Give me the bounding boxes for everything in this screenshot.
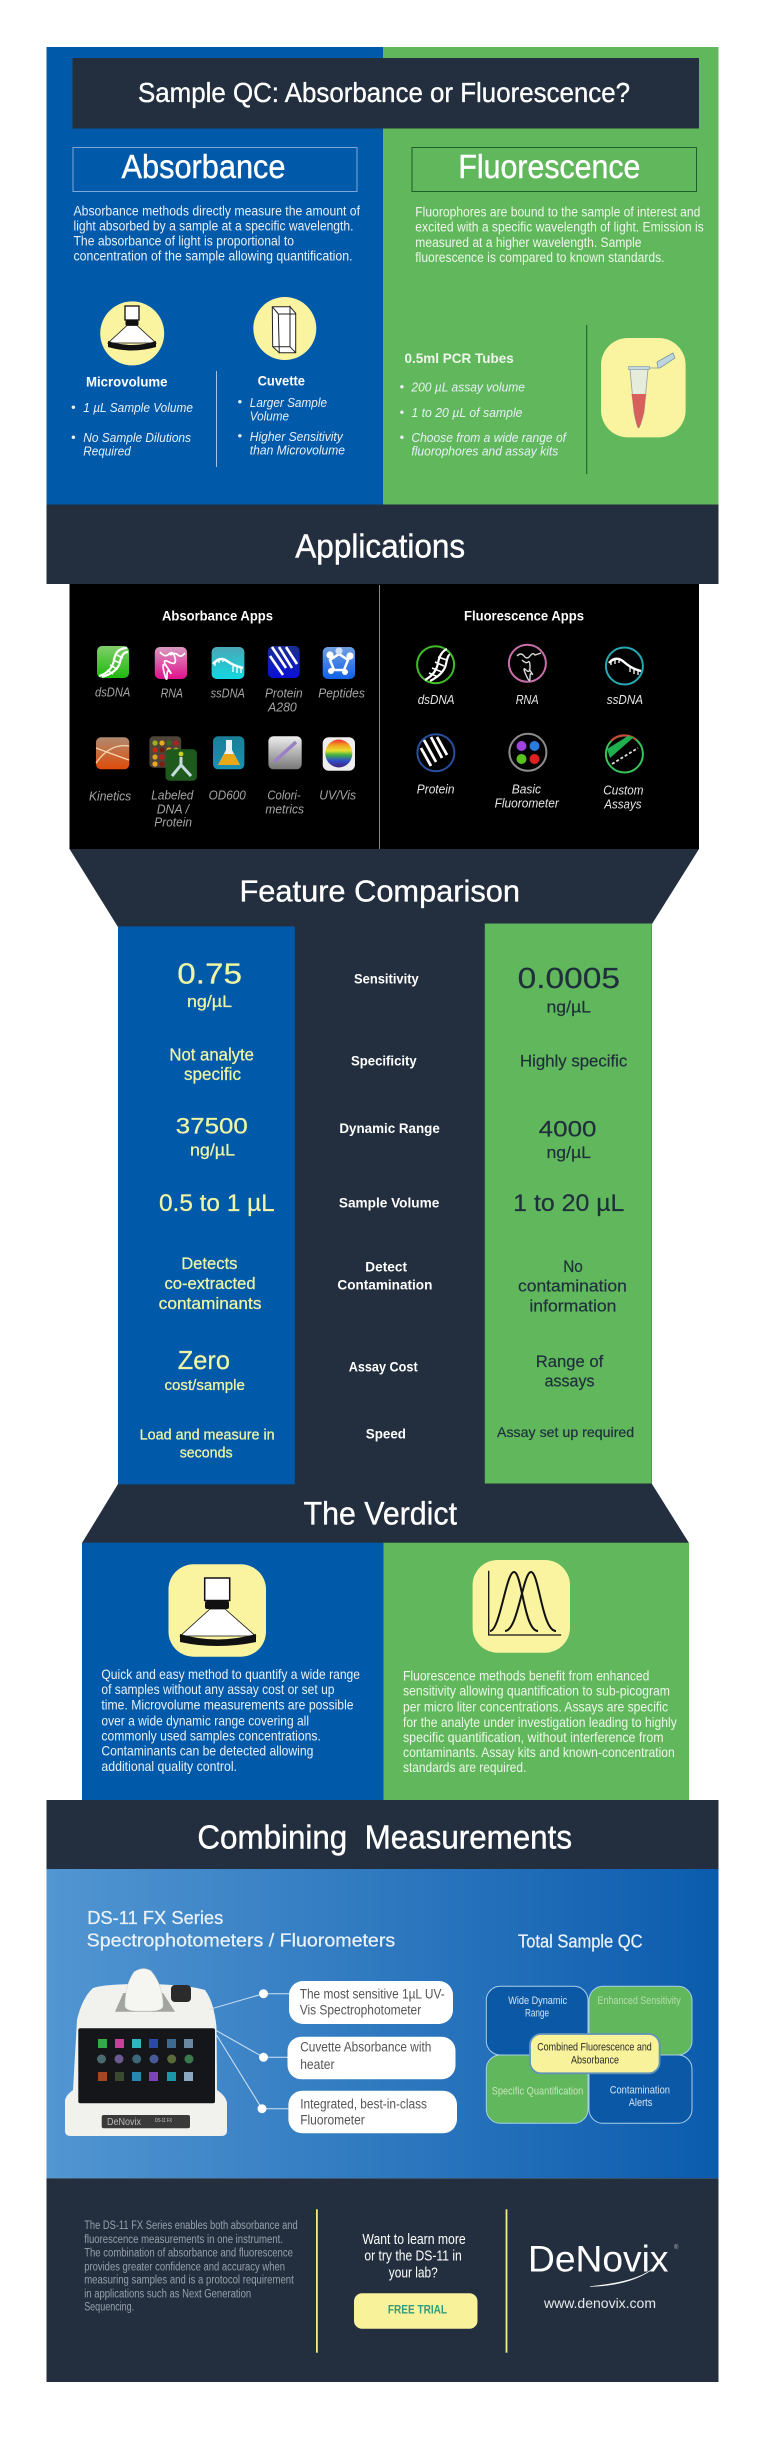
absorbance labels row 2: Protein bbox=[154, 815, 192, 830]
fluorescence labels: ssDNA bbox=[607, 692, 643, 707]
icon: protein ring bbox=[417, 734, 454, 771]
call to action: your lab? bbox=[389, 2266, 438, 2282]
column: fluorescence features: 1 to 20 µL bbox=[513, 1190, 624, 1217]
column: fluorescence features: assays bbox=[545, 1372, 594, 1391]
cuvette features: • bbox=[238, 394, 242, 409]
panel: fluorescence introduction bbox=[383, 47, 718, 505]
text block: absorbance description: The absorbance of light is proportional to bbox=[74, 234, 294, 249]
panel: applications bbox=[70, 584, 699, 849]
text block: absorbance verdict: time. Microvolume measurements are possible bbox=[101, 1696, 354, 1712]
absorbance labels row 2: Kinetics bbox=[89, 789, 132, 804]
text block: DS-11 summary bbox=[84, 2220, 298, 2314]
icon: dsDNA app bbox=[97, 646, 129, 678]
heading: Absorbance: Absorbance bbox=[122, 148, 286, 185]
absorbance labels row 2: UV/Vis bbox=[319, 787, 356, 802]
icon: kinetics app bbox=[96, 737, 129, 769]
column: feature names: Detect bbox=[365, 1259, 408, 1274]
button: free trial bbox=[354, 2293, 478, 2329]
column: absorbance features: co-extracted bbox=[164, 1274, 256, 1293]
heading: Fluorescence bbox=[412, 148, 696, 192]
fluorescence labels: Protein bbox=[417, 781, 454, 796]
fluorescence labels bbox=[417, 692, 644, 811]
icon: RNA ring bbox=[509, 645, 546, 682]
column: absorbance features: cost/sample bbox=[164, 1377, 245, 1394]
heading: absorbance apps: Absorbance Apps bbox=[162, 609, 273, 624]
diagram: total sample QC bbox=[486, 1986, 692, 2123]
button: free trial: FREE TRIAL bbox=[388, 2305, 447, 2317]
icon: ssDNA ring bbox=[606, 648, 643, 684]
text block: absorbance verdict: commonly used samples concentrations. bbox=[101, 1728, 321, 1744]
column: feature names: Contamination bbox=[337, 1278, 432, 1293]
column: feature names: Sample Volume bbox=[339, 1196, 440, 1210]
text block: fluorescence verdict: for the analyte under investigation leading to highly bbox=[403, 1714, 677, 1730]
text block: DS-11 summary: provides greater confidence and accuracy when bbox=[84, 2262, 285, 2274]
callout: cuvette absorbance: Cuvette Absorbance with bbox=[300, 2040, 431, 2055]
absorbance labels row 1: Peptides bbox=[318, 686, 365, 701]
text block: DS-11 summary: in applications such as Next Generation bbox=[84, 2288, 251, 2300]
column: absorbance features: 0.75 bbox=[177, 959, 242, 991]
diagram: total sample QC: Specific Quantification bbox=[492, 2086, 583, 2098]
text block: absorbance verdict bbox=[101, 1666, 360, 1774]
panel: combining measurements bbox=[46, 1869, 718, 2178]
fluorescence labels: Assays bbox=[603, 796, 642, 811]
microvolume features: Required bbox=[83, 443, 131, 458]
callout: cuvette absorbance: heater bbox=[300, 2057, 335, 2072]
icon: labeled DNA and protein app bbox=[149, 736, 197, 781]
fluorescence labels: dsDNA bbox=[418, 692, 454, 707]
column: fluorescence features: Range of bbox=[536, 1352, 604, 1371]
heading: DS-11 FX Series bbox=[87, 1907, 395, 1951]
heading: fluorescence apps: Fluorescence Apps bbox=[464, 609, 584, 624]
heading: DS-11 FX Series: DS-11 FX Series bbox=[87, 1907, 223, 1928]
column: fluorescence features: No bbox=[563, 1257, 583, 1276]
icon: basic fluorometer ring bbox=[509, 734, 546, 771]
icon: cuvette bbox=[253, 297, 316, 360]
microvolume features: 1 µL Sample Volume bbox=[83, 400, 193, 415]
icon: dsDNA ring bbox=[417, 646, 454, 683]
text block: fluorescence description bbox=[415, 205, 704, 265]
panel: footer bbox=[46, 2178, 718, 2382]
cuvette features: than Microvolume bbox=[250, 442, 345, 457]
column: fluorescence features bbox=[485, 924, 652, 1484]
column: absorbance features: Load and measure in bbox=[140, 1428, 275, 1444]
PCR tube features: • bbox=[400, 404, 404, 420]
icon: ssDNA app bbox=[212, 647, 244, 679]
absorbance labels row 2: DNA / bbox=[157, 801, 190, 816]
icon: colorimetrics app bbox=[268, 736, 302, 769]
absorbance labels row 2: Labeled bbox=[151, 787, 194, 802]
text block: fluorescence verdict: Fluorescence methods benefit from enhanced bbox=[403, 1667, 649, 1683]
text block: absorbance verdict: over a wide dynamic range covering all bbox=[101, 1712, 309, 1728]
absorbance labels row 1: dsDNA bbox=[95, 685, 130, 700]
diagram: total sample QC: Contamination bbox=[610, 2084, 670, 2096]
column: absorbance features: seconds bbox=[180, 1446, 233, 1462]
callout: sensitive spectrophotometer bbox=[289, 1981, 453, 2024]
icon: emission spectra bbox=[473, 1560, 570, 1653]
column: absorbance features: Detects bbox=[181, 1254, 238, 1273]
column: fluorescence features: 0.0005 bbox=[518, 963, 620, 995]
fluorescence labels: Custom bbox=[603, 783, 644, 798]
microvolume features: • bbox=[71, 430, 76, 444]
heading: DS-11 FX Series: Spectrophotometers / Fluorometers bbox=[87, 1930, 395, 1951]
column: absorbance features: Not analyte bbox=[169, 1044, 254, 1064]
icon: microvolume bbox=[100, 301, 164, 365]
heading shape: Feature Comparison bbox=[70, 849, 699, 1543]
text block: absorbance verdict: of samples without any assay cost or set up bbox=[101, 1681, 335, 1697]
device: DS-11 FX: DeNovix bbox=[107, 2117, 141, 2128]
text block: absorbance verdict: Contaminants can be detected allowing bbox=[101, 1743, 313, 1759]
text block: DS-11 summary: Sequencing. bbox=[84, 2302, 134, 2314]
fluorescence labels: Fluorometer bbox=[495, 795, 559, 810]
callout: integrated fluorometer bbox=[288, 2091, 457, 2133]
panel: absorbance introduction bbox=[46, 47, 384, 505]
title bar: Sample QC: Absorbance or Fluorescence? bbox=[138, 77, 630, 108]
heading bar: Applications bbox=[46, 504, 718, 584]
column: fluorescence features: 4000 bbox=[539, 1117, 596, 1142]
column: absorbance features: 0.5 to 1 µL bbox=[159, 1190, 275, 1217]
PCR tube features bbox=[400, 350, 567, 458]
PCR tube features: 0.5ml PCR Tubes bbox=[404, 350, 514, 366]
panel: fluorescence verdict bbox=[384, 1543, 689, 1801]
icon: custom assays ring bbox=[606, 735, 643, 772]
icon: OD600 app bbox=[213, 736, 244, 769]
column: fluorescence features: ng/µL bbox=[546, 1143, 591, 1162]
diagram: total sample QC: Combined Fluorescence and bbox=[537, 2042, 652, 2054]
heading: Fluorescence: Fluorescence bbox=[458, 148, 640, 185]
cuvette features: • bbox=[238, 428, 242, 443]
column: feature names: Assay Cost bbox=[349, 1360, 418, 1375]
column: fluorescence features: Highly specific bbox=[520, 1052, 628, 1071]
logo: DeNovix: DeNovix bbox=[528, 2239, 669, 2280]
microvolume features: Microvolume bbox=[86, 374, 168, 390]
diagram: total sample QC: Alerts bbox=[629, 2097, 653, 2109]
PCR tube features: 1 to 20 µL of sample bbox=[411, 405, 522, 420]
column: feature names: Sensitivity bbox=[354, 972, 419, 987]
text block: fluorescence description: excited with a specific wavelength of light. Emission is bbox=[415, 220, 704, 234]
call to action: Want to learn more bbox=[362, 2232, 466, 2248]
callout: integrated fluorometer: Fluorometer bbox=[300, 2113, 365, 2128]
absorbance labels row 1: ssDNA bbox=[211, 686, 245, 701]
callout: integrated fluorometer: Integrated, best-in-class bbox=[300, 2096, 427, 2111]
text block: absorbance verdict: Quick and easy method to quantify a wide range bbox=[101, 1666, 360, 1682]
column: feature names: Speed bbox=[366, 1426, 406, 1442]
column: fluorescence features: information bbox=[529, 1297, 616, 1316]
column: absorbance features: contaminants bbox=[159, 1294, 262, 1313]
heading bar: Combining Measurements: Combining Measurements bbox=[197, 1818, 572, 1855]
absorbance labels row 1 bbox=[95, 685, 365, 715]
column: absorbance features bbox=[118, 926, 295, 1484]
heading bar: Combining Measurements bbox=[46, 1800, 718, 1869]
fluorescence labels: RNA bbox=[516, 692, 539, 707]
column: fluorescence features: contamination bbox=[518, 1277, 627, 1296]
text block: DS-11 summary: fluorescence measurements in one instrument. bbox=[84, 2234, 283, 2246]
column: absorbance features: 37500 bbox=[176, 1114, 248, 1139]
column: fluorescence features: ng/µL bbox=[546, 998, 591, 1017]
column: fluorescence features: Assay set up required bbox=[497, 1424, 634, 1440]
icon: RNA app bbox=[155, 647, 187, 679]
column: absorbance features: specific bbox=[184, 1064, 241, 1084]
connector lines bbox=[210, 1989, 289, 2113]
cuvette features: Cuvette bbox=[258, 372, 305, 388]
heading: Total Sample QC: Total Sample QC bbox=[518, 1932, 642, 1952]
absorbance labels row 2 bbox=[89, 787, 356, 830]
text block: DS-11 summary: The DS-11 FX Series enables both absorbance and bbox=[84, 2220, 298, 2232]
title bar bbox=[72, 58, 699, 128]
column: feature names: Specificity bbox=[351, 1053, 417, 1068]
cuvette features: Higher Sensitivity bbox=[250, 429, 344, 444]
text block: absorbance verdict: additional quality control. bbox=[101, 1758, 237, 1774]
absorbance labels row 2: OD600 bbox=[209, 787, 246, 802]
logo: DeNovix: ® bbox=[674, 2244, 679, 2251]
column: absorbance features: ng/µL bbox=[190, 1141, 235, 1160]
text block: fluorescence verdict: per micro liter concentrations. Assays are specific bbox=[403, 1699, 668, 1715]
text block: absorbance description: concentration of the sample allowing quantification. bbox=[74, 249, 352, 264]
heading: Absorbance bbox=[73, 148, 357, 192]
call to action bbox=[362, 2232, 466, 2282]
device: DS-11 FX bbox=[65, 1969, 227, 2136]
text block: fluorescence verdict: standards are required. bbox=[403, 1759, 526, 1775]
diagram: total sample QC: Wide Dynamic bbox=[508, 1995, 567, 2007]
icon: PCR tube bbox=[601, 338, 686, 437]
microvolume features bbox=[71, 374, 193, 458]
callout: sensitive spectrophotometer: Vis Spectrophotometer bbox=[300, 2002, 422, 2017]
PCR tube features: • bbox=[400, 379, 404, 394]
microvolume features: No Sample Dilutions bbox=[83, 430, 191, 445]
text block: DS-11 summary: measuring samples and is a protocol requirement bbox=[84, 2275, 294, 2287]
text block: fluorescence verdict bbox=[403, 1667, 677, 1775]
PCR tube features: Choose from a wide range of bbox=[411, 430, 567, 445]
microvolume features: • bbox=[71, 400, 76, 414]
icon: microvolume bbox=[168, 1564, 266, 1657]
absorbance labels row 1: Protein bbox=[265, 686, 303, 701]
callout: sensitive spectrophotometer: The most sensitive 1µL UV- bbox=[300, 1986, 445, 2001]
text block: absorbance description: light absorbed by a sample at a specific wavelength. bbox=[74, 218, 354, 234]
text block: fluorescence verdict: contaminants. Assay kits and known-concentration bbox=[403, 1744, 675, 1760]
icon: peptides app bbox=[323, 647, 355, 679]
column: feature names bbox=[337, 972, 440, 1442]
PCR tube features: • bbox=[400, 430, 404, 444]
heading bar: Applications: Applications bbox=[295, 527, 465, 564]
text block: absorbance description: Absorbance methods directly measure the amount of bbox=[74, 204, 360, 218]
text block: fluorescence description: Fluorophores are bound to the sample of interest and bbox=[415, 205, 700, 220]
absorbance labels row 1: RNA bbox=[161, 686, 183, 701]
icon: protein A280 app bbox=[268, 646, 300, 678]
diagram: total sample QC: Enhanced Sensitivity bbox=[597, 1995, 681, 2007]
fluorescence labels: Basic bbox=[512, 781, 541, 796]
icon: UV/Vis app bbox=[323, 737, 355, 771]
text block: fluorescence verdict: sensitivity allowing quantification to sub-picogram bbox=[403, 1683, 670, 1699]
cuvette features: Volume bbox=[250, 409, 289, 424]
diagram: total sample QC: Range bbox=[525, 2008, 549, 2020]
text block: fluorescence description: fluorescence is compared to known standards. bbox=[415, 250, 664, 265]
device: DS-11 FX: DS-11 FX bbox=[155, 2118, 172, 2124]
logo: DeNovix: www.denovix.com bbox=[543, 2295, 656, 2311]
callout: cuvette absorbance bbox=[288, 2037, 456, 2079]
heading: The Verdict: The Verdict bbox=[304, 1495, 457, 1531]
text block: fluorescence description: measured at a higher wavelength. Sample bbox=[415, 235, 642, 250]
absorbance labels row 1: A280 bbox=[267, 700, 298, 715]
cuvette features bbox=[238, 372, 345, 457]
text block: DS-11 summary: The combination of absorbance and fluorescence bbox=[84, 2248, 293, 2260]
PCR tube features: 200 µL assay volume bbox=[410, 380, 525, 394]
text block: absorbance description bbox=[74, 204, 360, 264]
diagram: total sample QC: Absorbance bbox=[571, 2054, 619, 2066]
PCR tube features: fluorophores and assay kits bbox=[411, 443, 559, 458]
text block: fluorescence verdict: specific quantification, without interference from bbox=[403, 1729, 664, 1745]
cuvette features: Larger Sample bbox=[250, 395, 327, 410]
column: feature names: Dynamic Range bbox=[339, 1121, 440, 1136]
panel: absorbance verdict bbox=[82, 1543, 384, 1801]
absorbance labels row 2: metrics bbox=[265, 801, 304, 816]
column: absorbance features: Zero bbox=[178, 1345, 230, 1375]
column: absorbance features: ng/µL bbox=[187, 992, 232, 1011]
heading shape: Feature Comparison: Feature Comparison bbox=[240, 874, 520, 909]
absorbance labels row 2: Colori- bbox=[267, 787, 301, 802]
logo: DeNovix bbox=[528, 2239, 679, 2311]
call to action: or try the DS-11 in bbox=[364, 2248, 462, 2264]
